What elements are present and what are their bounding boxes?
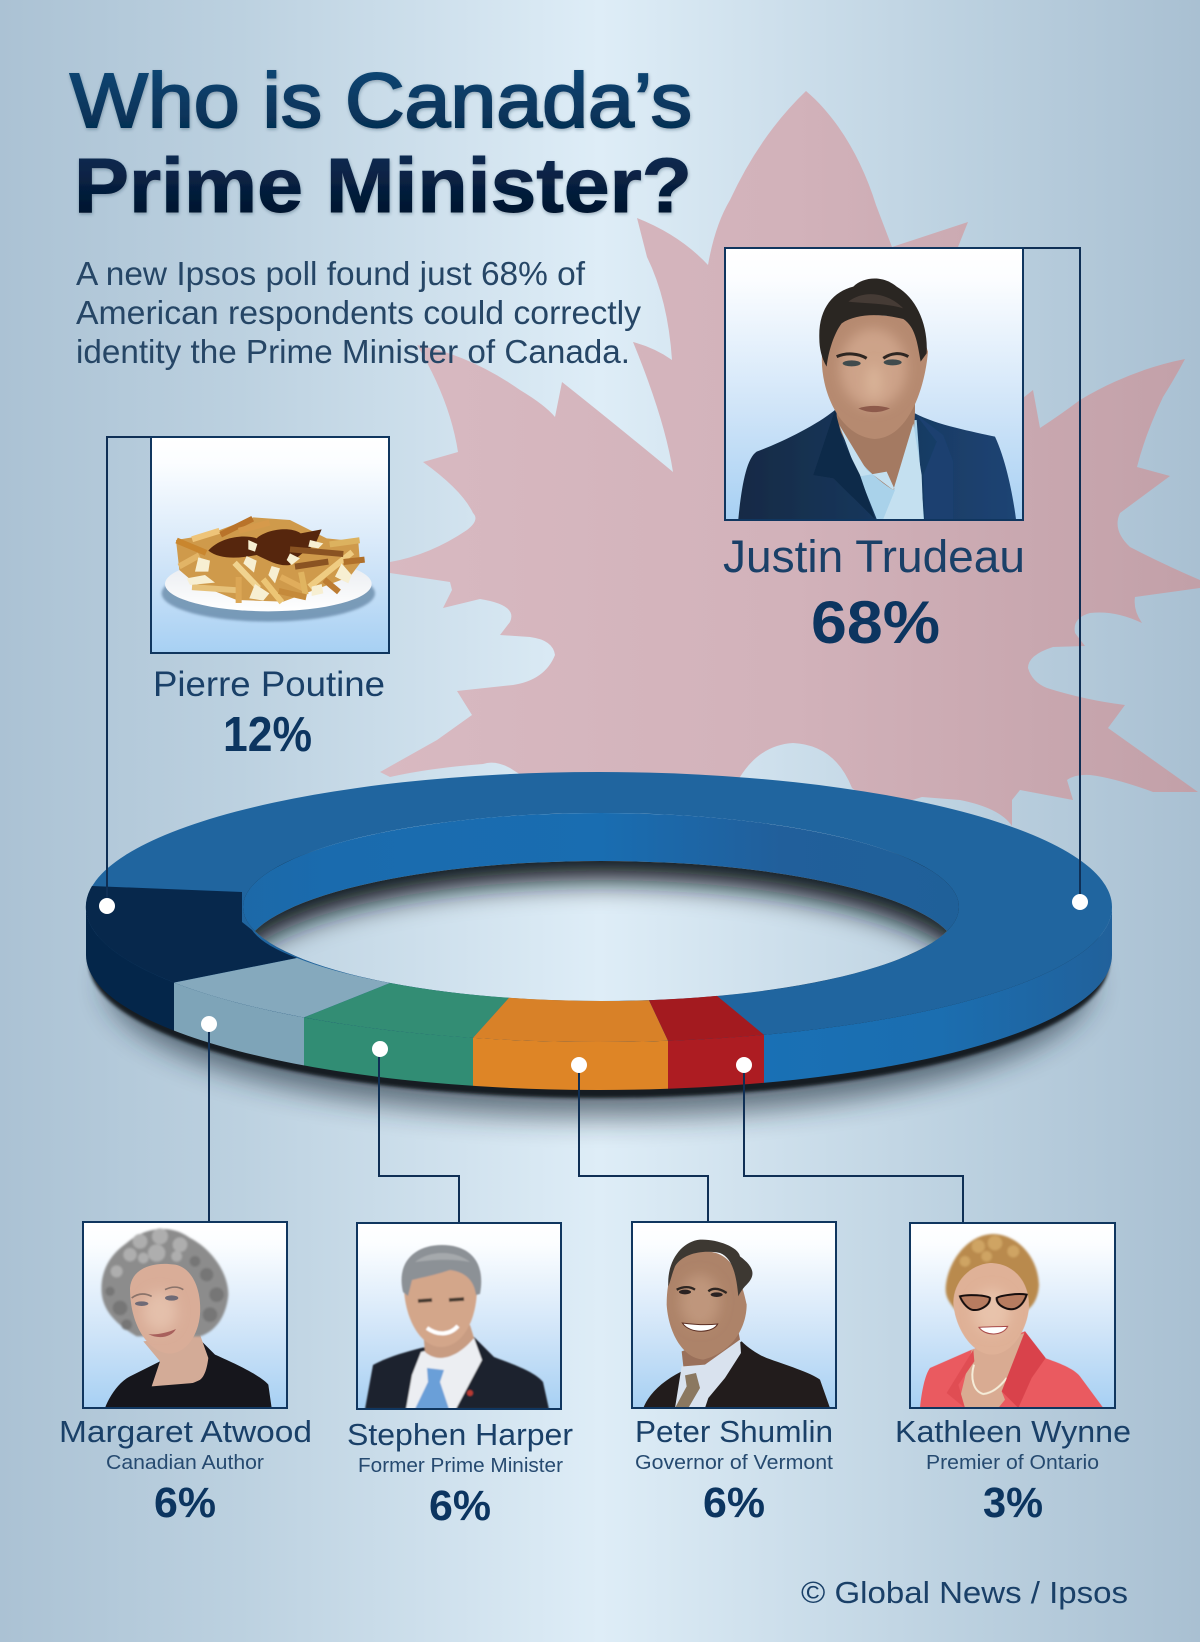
hard shadow edge	[89, 828, 1109, 1098]
outer side walls	[86, 910, 1112, 1090]
photo: Justin Trudeau	[725, 248, 1023, 520]
panel: Margaret Atwood	[59, 1222, 312, 1527]
name: Pierre Poutine: Pierre Poutine	[153, 665, 385, 704]
inner wall	[243, 813, 959, 1001]
top surface: Kathleen Wynne segment	[649, 996, 764, 1041]
value: 6%: 6%	[429, 1482, 491, 1530]
panel: Kathleen Wynne	[895, 1223, 1131, 1527]
photo: Peter Shumlin	[632, 1222, 836, 1408]
photo: poutine plate	[151, 437, 389, 653]
source credit: © Global News / Ipsos	[801, 1575, 1128, 1610]
photo: Margaret Atwood	[83, 1222, 287, 1408]
name: Margaret Atwood: Margaret Atwood	[59, 1414, 312, 1449]
role: Governor of Vermont: Governor of Vermont	[635, 1451, 833, 1474]
photo: Stephen Harper	[357, 1223, 561, 1409]
panel: Pierre Poutine	[151, 437, 389, 762]
value: 6%: 6%	[703, 1479, 765, 1527]
name: Peter Shumlin: Peter Shumlin	[635, 1414, 833, 1449]
intro text: identity the Prime Minister of Canada.	[76, 333, 630, 370]
connector lines	[107, 248, 1080, 1223]
photo: Kathleen Wynne	[910, 1223, 1115, 1408]
donut chart	[0, 772, 1200, 1117]
title line 2: Prime Minister?	[74, 143, 692, 229]
role: Canadian Author: Canadian Author	[106, 1451, 264, 1474]
ground shadow	[107, 851, 1091, 1117]
top surface: Peter Shumlin segment	[473, 998, 668, 1042]
name: Justin Trudeau: Justin Trudeau	[723, 531, 1025, 582]
role: Former Prime Minister: Former Prime Minister	[358, 1454, 563, 1477]
hole showing background	[255, 861, 947, 1001]
value: 6%: 6%	[154, 1479, 216, 1527]
chart marker dots	[99, 894, 1088, 1073]
name: Kathleen Wynne: Kathleen Wynne	[895, 1414, 1131, 1449]
maple leaf	[380, 91, 1200, 826]
top surface: Pierre Poutine segment	[86, 886, 297, 983]
intro text: A new Ipsos poll found just 68% of	[76, 255, 586, 292]
panel: Justin Trudeau	[723, 248, 1025, 656]
role: Premier of Ontario: Premier of Ontario	[926, 1451, 1099, 1474]
panel: Peter Shumlin	[632, 1222, 836, 1527]
value: 12%: 12%	[223, 708, 312, 762]
title line 1: Who is Canada’s	[70, 58, 692, 144]
intro text: American respondents could correctly	[76, 294, 642, 331]
value: 3%: 3%	[983, 1479, 1043, 1527]
top surface: Margaret Atwood segment	[174, 958, 390, 1017]
name: Stephen Harper: Stephen Harper	[347, 1417, 573, 1452]
top surface: Justin Trudeau segment	[86, 772, 1112, 1042]
intro text	[76, 255, 642, 370]
title	[70, 58, 692, 229]
panel: Stephen Harper	[347, 1223, 573, 1530]
top surface: Stephen Harper segment	[304, 983, 509, 1038]
value: 68%: 68%	[811, 589, 940, 656]
